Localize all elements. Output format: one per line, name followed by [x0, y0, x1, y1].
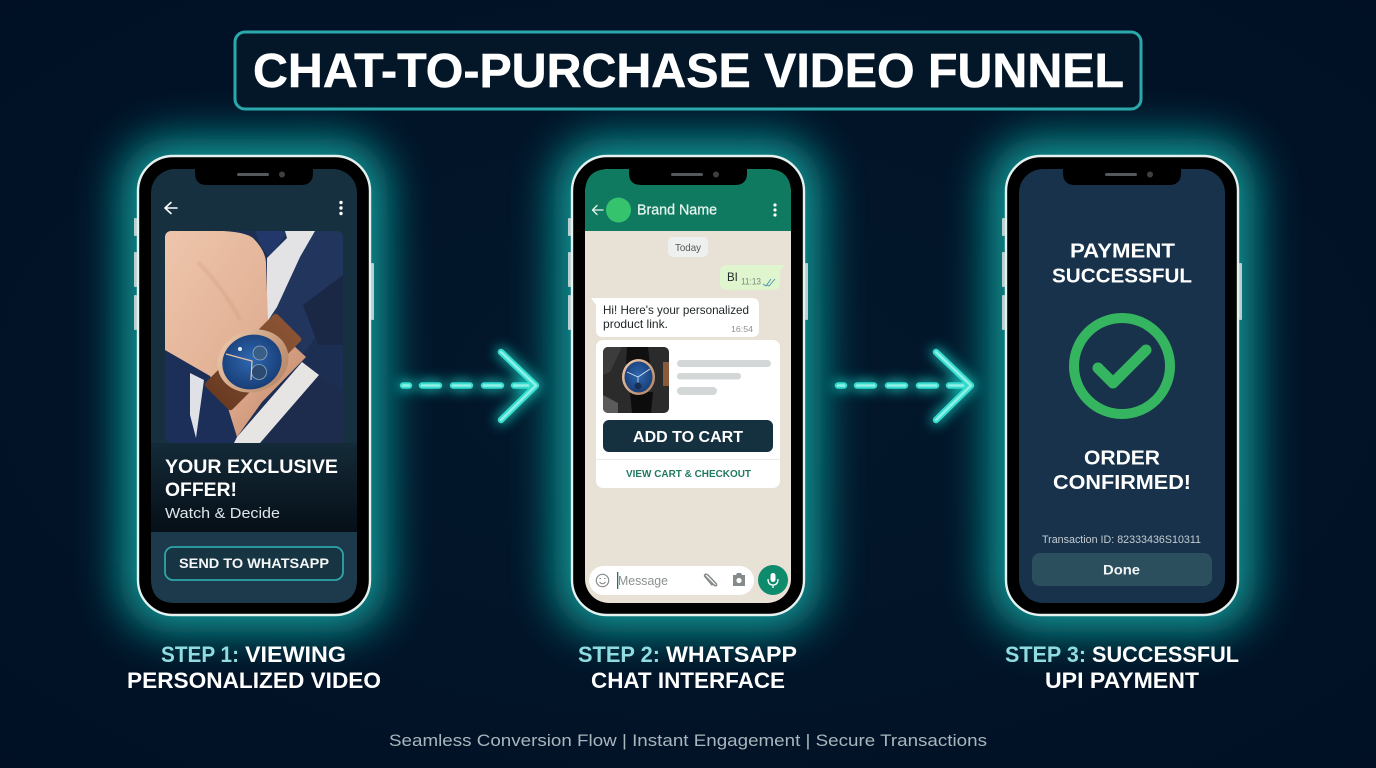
step 2 caption: STEP 2: [578, 642, 660, 667]
title banner [235, 32, 1141, 109]
payment successful heading [1052, 240, 1192, 288]
send to whatsapp button: SEND TO WHATSAPP [179, 555, 329, 571]
step 2 caption: CHAT INTERFACE [591, 668, 785, 693]
phone 2: whatsapp chat [568, 156, 808, 615]
received message bubble: Hi! Here's your personalized [603, 303, 749, 317]
step 2 caption: WHATSAPP [666, 642, 797, 667]
date chip [668, 237, 708, 257]
sent message bubble: BI [727, 272, 738, 284]
step 1 caption: PERSONALIZED VIDEO [127, 668, 381, 693]
sent message bubble [720, 265, 785, 290]
order confirmed heading: ORDER [1084, 448, 1161, 470]
order confirmed heading [1053, 448, 1191, 494]
order confirmed heading: CONFIRMED! [1053, 472, 1191, 494]
done button: Done [1103, 562, 1140, 578]
date chip: Today [675, 242, 702, 254]
notch [629, 168, 747, 185]
step 1 caption: VIEWING [245, 642, 346, 667]
step 1 caption: STEP 1: [161, 642, 239, 667]
transaction id: Transaction ID: 82333436S10311 [1042, 534, 1201, 546]
message input bar: Message [618, 573, 668, 588]
add to cart button: ADD TO CART [633, 429, 743, 446]
step 3 caption: STEP 3: [1005, 642, 1086, 667]
placeholder lines [677, 360, 771, 395]
phone glow halos [121, 139, 1255, 632]
done button [1032, 553, 1212, 586]
menu dots icon [339, 201, 343, 215]
received message bubble: 16:54 [731, 324, 753, 334]
wrist watch photo [165, 231, 343, 443]
sent message bubble: 11:13 [741, 276, 761, 286]
offer heading: YOUR EXCLUSIVE [165, 457, 338, 478]
footer tagline: Seamless Conversion Flow | Instant Engagement | Secure Transactions [389, 731, 987, 750]
microphone button [758, 565, 788, 595]
offer subtitle: Watch & Decide [165, 505, 280, 522]
arrow 1 [403, 352, 536, 420]
payment successful heading: PAYMENT [1070, 240, 1175, 262]
message input bar [589, 566, 754, 595]
arrow 2 [838, 352, 971, 420]
notch [195, 168, 313, 185]
view cart link: VIEW CART & CHECKOUT [626, 468, 752, 480]
product thumbnail: watch [603, 347, 669, 413]
phone 3: payment confirmation [1002, 156, 1242, 615]
received message bubble: product link. [603, 317, 668, 331]
chat header [585, 169, 791, 231]
send to whatsapp button [165, 547, 343, 580]
step 3 caption [1005, 642, 1239, 693]
received message bubble [591, 298, 759, 337]
step 1 caption [127, 642, 381, 693]
offer heading: OFFER! [165, 480, 237, 501]
chat header: Brand Name [637, 202, 717, 218]
chat wallpaper [585, 169, 791, 603]
phone 1: personalized video [134, 156, 374, 615]
success check icon [1074, 318, 1170, 414]
back arrow icon [165, 202, 177, 214]
payment successful heading: SUCCESSFUL [1052, 266, 1192, 288]
product card [596, 340, 780, 488]
title banner: CHAT-TO-PURCHASE VIDEO FUNNEL [253, 45, 1124, 98]
step 2 caption [578, 642, 797, 693]
button panel [151, 532, 357, 603]
step 3 caption: SUCCESSFUL [1092, 642, 1239, 667]
offer heading [165, 457, 338, 501]
add to cart button [603, 420, 773, 452]
step 3 caption: UPI PAYMENT [1045, 668, 1200, 693]
offer gradient panel [151, 443, 357, 532]
